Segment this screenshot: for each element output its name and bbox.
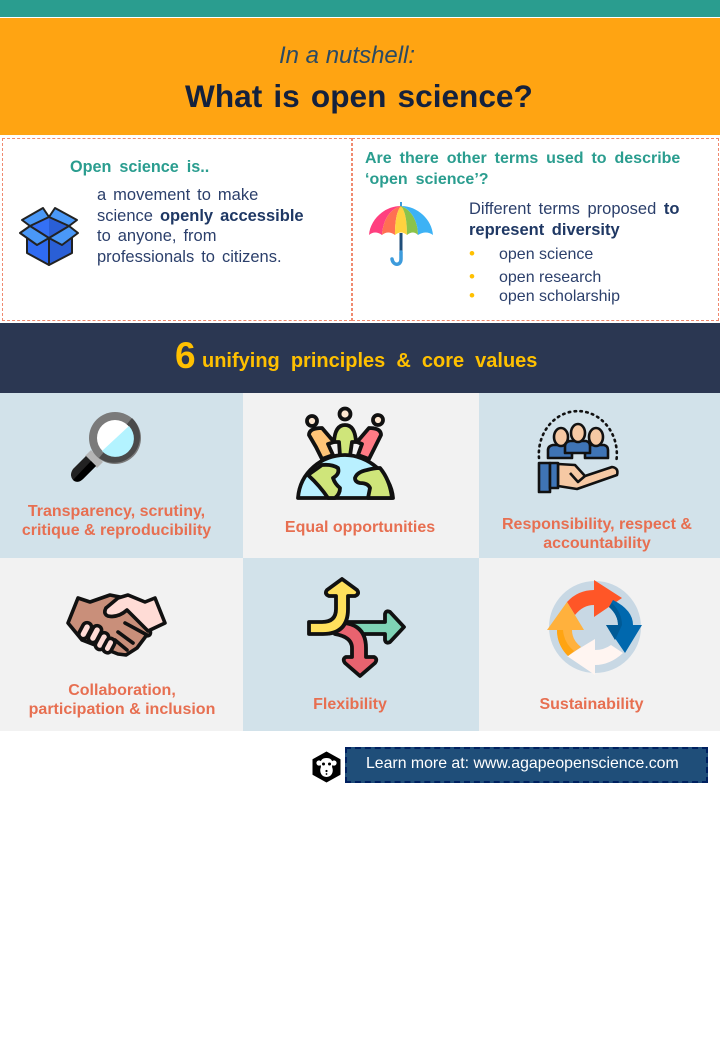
top teal bar	[0, 0, 720, 17]
icon: hand holding people	[538, 410, 619, 494]
panel heading: Are there other terms used to describe	[365, 150, 680, 167]
cell label: Collaboration,	[68, 682, 176, 699]
panel heading: ‘open science’?	[365, 171, 489, 188]
definition text: science openly accessible	[97, 207, 304, 225]
definition text: to anyone, from	[97, 227, 216, 245]
icon: circular arrows	[547, 580, 642, 675]
learn more button: Learn more at: www.agapeopenscience.com	[366, 755, 679, 772]
cell: collaboration	[0, 558, 243, 731]
cell label: critique & reproducibility	[22, 522, 211, 539]
cell: transparency	[0, 393, 243, 558]
cell: flexibility	[243, 558, 479, 731]
term: open research	[499, 269, 601, 286]
icon: magnifying glass	[71, 412, 141, 482]
diversity text: represent diversity	[469, 221, 620, 239]
cell label: Sustainability	[539, 696, 644, 713]
cell label	[29, 682, 215, 718]
diversity text	[469, 200, 679, 239]
icon: monkey logo	[312, 752, 340, 782]
learn more button	[345, 747, 708, 783]
icon: rainbow umbrella	[369, 202, 433, 266]
term: open science	[499, 246, 593, 263]
cell label: Flexibility	[313, 696, 387, 713]
icon: open box	[19, 207, 79, 266]
icon: handshake	[66, 593, 167, 657]
icon: people on globe	[296, 406, 395, 500]
cell label: participation & inclusion	[29, 701, 215, 718]
panel: open science definition	[2, 138, 352, 321]
icon: branching arrows	[307, 577, 406, 678]
term: open scholarship	[499, 288, 620, 305]
cell label: accountability	[543, 535, 651, 552]
bullet: •	[469, 267, 475, 286]
bullet: •	[469, 244, 475, 263]
cell label	[502, 516, 692, 552]
principles heading band	[0, 323, 720, 393]
main title: What is open science?	[185, 78, 533, 114]
cell label: Responsibility, respect &	[502, 516, 692, 533]
panel heading	[365, 150, 680, 188]
heading text: unifying principles & core values	[202, 350, 537, 372]
definition text	[97, 186, 304, 266]
subtitle: In a nutshell:	[279, 42, 415, 69]
panel: other terms	[352, 138, 719, 321]
heading number: 6	[175, 335, 196, 376]
bullet: •	[469, 286, 475, 305]
cell label	[22, 503, 211, 539]
cell: equal opportunities	[243, 393, 479, 558]
panel heading: Open science is..	[70, 158, 209, 176]
cell label: Transparency, scrutiny,	[28, 503, 205, 520]
cell: responsibility	[479, 393, 720, 558]
list of terms	[469, 244, 620, 305]
title banner	[0, 18, 720, 135]
cell label: Equal opportunities	[285, 519, 435, 536]
cell: sustainability	[479, 558, 720, 731]
definition text: a movement to make	[97, 186, 258, 204]
diversity text: Different terms proposed to	[469, 200, 679, 218]
definition text: professionals to citizens.	[97, 248, 282, 266]
